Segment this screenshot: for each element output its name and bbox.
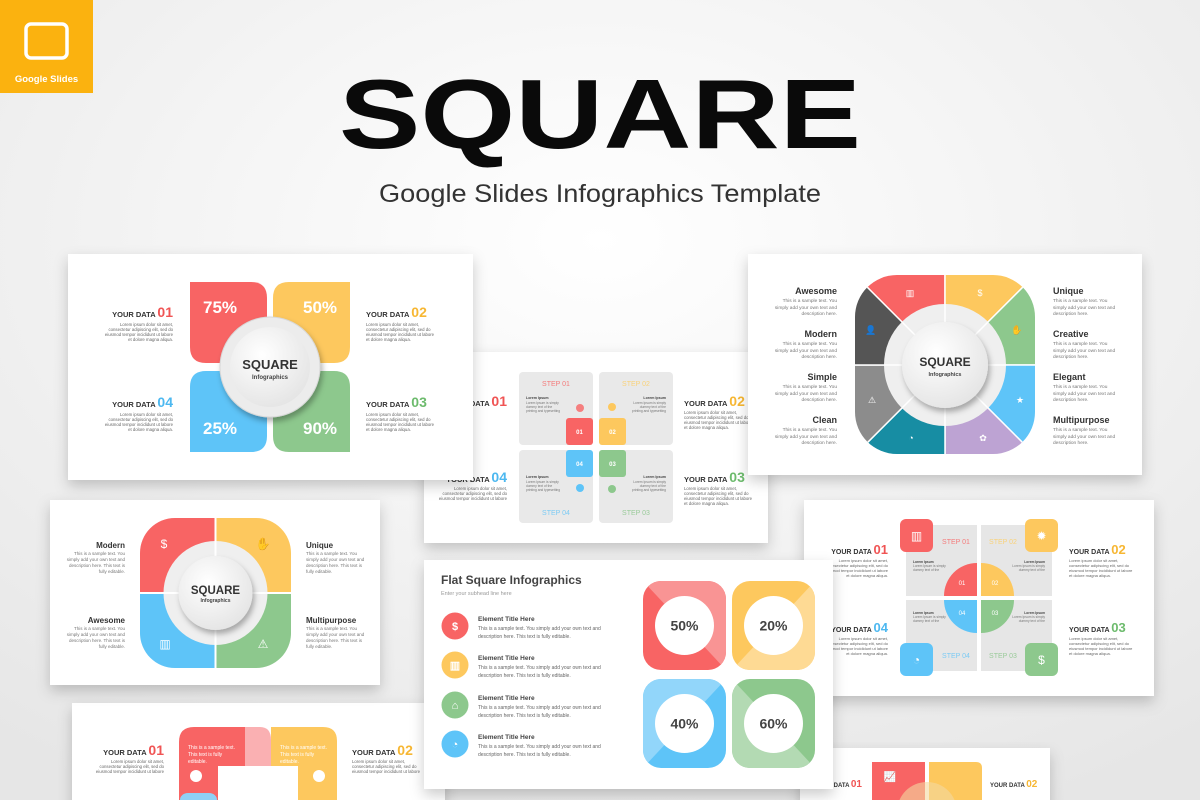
slide C: eight segment rounded square: description here. [802, 311, 837, 317]
slide C: eight segment rounded square: This is a sample text. You [1053, 427, 1108, 433]
slide G: bottom left partial: editable. [280, 759, 299, 765]
slide E: flat square infographics: description here. This text is fully editable. [478, 713, 571, 719]
slide F: step tabs with center circle: eiusmod tempor incididunt ut labore [1069, 646, 1133, 651]
slide E: flat square infographics: ◔ [452, 739, 458, 751]
slide E: flat square infographics: Element Title Here [478, 695, 535, 702]
slide A: four squares with percentages: 50% [303, 298, 337, 317]
slide A: four squares with percentages: 75% [203, 298, 237, 317]
title: SQUARE [339, 59, 861, 169]
slide F: step tabs with center circle: et dolore magna aliqua. [846, 573, 888, 578]
slide G: bottom left partial: eiusmod tempor incididunt ut labore [96, 769, 165, 774]
slide D: four quadrant rounded square: Unique [306, 541, 334, 550]
slide F: step tabs with center circle: consectetur adipiscing elit, sed do [1069, 641, 1130, 646]
slide F: step tabs with center circle: Lorem ipsum dolor sit amet, [1069, 558, 1118, 563]
slide C: eight segment rounded square: This is a sample text. You [783, 384, 837, 390]
slide D: four quadrant rounded square: simply add your own text and [306, 632, 365, 637]
slide E: flat square infographics: Element Title Here [478, 655, 535, 662]
slide C: eight segment rounded square: description here. [802, 397, 837, 403]
subtitle: Google Slides Infographics Template [379, 180, 821, 208]
slide B: step grid: printing and typesetting [632, 488, 666, 492]
slide C: eight segment rounded square: This is a sample text. You [783, 427, 837, 433]
slide D: four quadrant rounded square: simply add your own text and [306, 557, 365, 562]
slide G: bottom left partial: This text is fully [188, 752, 223, 758]
slide F: step tabs with center circle: Lorem ipsum dolor sit amet, [839, 636, 888, 641]
slide E: flat square infographics: Element Title Here [478, 616, 535, 623]
slide A: four squares with percentages: YOUR DATA 04 [112, 394, 173, 410]
slide D: four quadrant rounded square: fully editable. [99, 644, 125, 649]
slide B: step grid: Lorem Ipsum [526, 396, 549, 400]
slide G: bottom left partial [72, 703, 445, 800]
slide B: step grid: Lorem ipsum dolor sit amet, [684, 410, 737, 415]
slide A: four squares with percentages: eiusmod tempor incididunt ut labore [366, 422, 435, 427]
slide D: four quadrant rounded square: This is a sample text. You [74, 551, 125, 556]
slide G: bottom left partial: editable. [188, 759, 207, 765]
slide F: step tabs with center circle: et dolore magna aliqua. [1069, 573, 1111, 578]
slide B: step grid: YOUR DATA 03 [684, 469, 745, 485]
slide E: flat square infographics: description here. This text is fully editable. [478, 673, 571, 679]
slide D: four quadrant rounded square: description here. This text is [306, 563, 363, 568]
slide A: four squares with percentages: consectetur adipiscing elit, sed do [366, 327, 431, 332]
slide B: step grid: dummy text of the [526, 484, 552, 488]
slide B: step grid: Lorem Ipsum [643, 475, 666, 479]
slide C: eight segment rounded square [742, 254, 1148, 488]
slide H: bottom right partial: YOUR DATA 01 [815, 779, 862, 790]
slide E: flat square infographics: Element Title Here [478, 734, 535, 741]
slide A: four squares with percentages: Lorem ipsum dolor sit amet, [366, 322, 419, 327]
logo: Google Slides badge [0, 0, 93, 93]
slide G: bottom left partial: Lorem ipsum dolor sit amet, [111, 759, 164, 764]
slide A: four squares with percentages: Lorem ipsum dolor sit amet, [366, 412, 419, 417]
slide C: eight segment rounded square: simply add your own text and [775, 391, 837, 397]
slide C: eight segment rounded square: simply add your own text and [1053, 391, 1115, 397]
slide B: step grid: 04 [576, 462, 583, 468]
slide B: step grid: et dolore magna aliqua. [684, 501, 729, 506]
slide E: flat square infographics: 20% [759, 618, 788, 634]
slide B: step grid: consectetur adipiscing elit, sed do [684, 491, 749, 496]
slide F: step tabs with center circle: dummy text of the [913, 568, 939, 572]
slide F: step tabs with center circle: Lorem Ipsum is simply [913, 615, 946, 619]
slide G: bottom left partial: Lorem ipsum dolor sit amet, [352, 759, 405, 764]
slide D: four quadrant rounded square: simply add your own text and [67, 632, 125, 637]
slide F: step tabs with center circle: 02 [992, 581, 999, 587]
slide B: step grid: Lorem Ipsum is simply [526, 401, 559, 405]
slide B: step grid: eiusmod tempor incididunt ut labore [684, 420, 753, 425]
slide B: step grid: printing and typesetting [632, 409, 666, 413]
slide B: step grid: eiusmod tempor incididunt ut labore [439, 496, 508, 501]
slide H: bottom right partial [800, 748, 1050, 800]
slide F: step tabs with center circle: ◔ [913, 653, 920, 667]
slide C: eight segment rounded square: description here. [802, 354, 837, 360]
slide F: step tabs with center circle: STEP 02 [989, 539, 1017, 546]
slide G: bottom left partial: This text is fully [280, 752, 315, 758]
slide B: step grid: dummy text of the [526, 405, 552, 409]
slide C: eight segment rounded square: Awesome [795, 286, 837, 296]
slide B: step grid: STEP 02 [622, 381, 650, 388]
slide F: step tabs with center circle: consectetur adipiscing elit, sed do [828, 563, 889, 568]
slide C: eight segment rounded square: ⚠ [868, 395, 876, 405]
slide F: step tabs with center circle: eiusmod tempor incididunt ut labore [1069, 568, 1133, 573]
slide E: flat square infographics: 40% [670, 716, 699, 732]
slide A: four squares with percentages: Infographics [252, 375, 289, 381]
slide C: eight segment rounded square: simply add your own text and [1053, 434, 1115, 440]
slide B: step grid: Lorem ipsum dolor sit amet, [684, 486, 737, 491]
slide E: flat square infographics [424, 560, 833, 789]
slide B: step grid: Lorem Ipsum [526, 475, 549, 479]
slide F: step tabs with center circle: Lorem Ipsum [1024, 611, 1045, 615]
slide D: four quadrant rounded square: fully editable. [306, 569, 332, 574]
slide E: flat square infographics: description here. This text is fully editable. [478, 634, 571, 640]
slide B: step grid: YOUR DATA 02 [684, 393, 745, 409]
slide E: flat square infographics: description here. This text is fully editable. [478, 752, 571, 758]
slide G: bottom left partial: consectetur adipiscing elit, sed do [100, 764, 165, 769]
slide C: eight segment rounded square: Infographics [928, 372, 962, 378]
slide F: step tabs with center circle: eiusmod tempor incididunt ut labore [825, 646, 889, 651]
slide F: step tabs with center circle: YOUR DATA 01 [831, 542, 888, 557]
slide F: step tabs with center circle: ✹ [1036, 529, 1047, 543]
slide B: step grid: dummy text of the [640, 484, 666, 488]
slide F: step tabs with center circle: Lorem Ipsum [913, 611, 934, 615]
slide D: four quadrant rounded square: fully editable. [306, 644, 332, 649]
slide E: flat square infographics: 60% [759, 716, 788, 732]
slide D: four quadrant rounded square: description here. This text is [69, 638, 126, 643]
slide F: step tabs with center circle: Lorem ipsum dolor sit amet, [839, 558, 888, 563]
slide E: flat square infographics: ⌂ [452, 700, 458, 712]
slide B: step grid: Lorem Ipsum is simply [526, 480, 559, 484]
slide F: step tabs with center circle: YOUR DATA 03 [1069, 620, 1126, 635]
slide G: bottom left partial: This is a sample text. [280, 745, 327, 751]
slide B: step grid: 03 [609, 462, 616, 468]
slide A: four squares with percentages [68, 254, 473, 480]
slide F: step tabs with center circle: ▥ [911, 529, 922, 543]
slide E: flat square infographics: This is a sample text. You simply add your own text and [478, 665, 601, 671]
slide F: step tabs with center circle: consectetur adipiscing elit, sed do [1069, 563, 1130, 568]
slide C: eight segment rounded square: This is a sample text. You [783, 298, 837, 304]
slide H: bottom right partial: 📈 [884, 770, 896, 783]
slide B: step grid: STEP 01 [542, 381, 570, 388]
slide A: four squares with percentages: Lorem ipsum dolor sit amet, [120, 322, 173, 327]
slide C: eight segment rounded square: simply add your own text and [1053, 305, 1115, 311]
slide C: eight segment rounded square: description here. [802, 440, 837, 446]
slide G: bottom left partial: eiusmod tempor incididunt ut labore [352, 769, 421, 774]
slide D: four quadrant rounded square: Multipurpose [306, 616, 357, 625]
slide F: step tabs with center circle: dummy text of the [1019, 619, 1045, 623]
slide B: step grid: printing and typesetting [526, 488, 560, 492]
slide C: eight segment rounded square: 👤 [865, 324, 877, 335]
slide A: four squares with percentages: consectetur adipiscing elit, sed do [366, 417, 431, 422]
slide D: four quadrant rounded square [50, 500, 380, 685]
slide D: four quadrant rounded square: ✋ [256, 537, 270, 551]
slide D: four quadrant rounded square: fully editable. [99, 569, 125, 574]
slide A: four squares with percentages: 90% [303, 419, 337, 438]
slide D: four quadrant rounded square: Modern [96, 541, 125, 550]
slide C: eight segment rounded square: $ [977, 288, 983, 298]
slide A: four squares with percentages: YOUR DATA 03 [366, 394, 427, 410]
slide H: bottom right partial: YOUR DATA 02 [990, 779, 1038, 790]
slide D: four quadrant rounded square: ⚠ [258, 637, 269, 651]
slide C: eight segment rounded square: Elegant [1053, 372, 1086, 382]
slide G: bottom left partial: This is a sample text. [188, 745, 235, 751]
slide A: four squares with percentages: et dolore magna aliqua. [128, 337, 173, 342]
slide B: step grid: eiusmod tempor incididunt ut labore [684, 496, 753, 501]
slide C: eight segment rounded square: ◔ [908, 433, 914, 443]
slide F: step tabs with center circle: consectetur adipiscing elit, sed do [828, 641, 889, 646]
slide F: step tabs with center circle: YOUR DATA 04 [831, 620, 889, 635]
slide C: eight segment rounded square: ▥ [906, 288, 914, 298]
slide F: step tabs with center circle: STEP 04 [942, 653, 970, 660]
slide D: four quadrant rounded square: This is a sample text. You [74, 626, 125, 631]
slide F: step tabs with center circle: et dolore magna aliqua. [1069, 651, 1111, 656]
slide F: step tabs with center circle: dummy text of the [913, 619, 939, 623]
slide A: four squares with percentages: et dolore magna aliqua. [128, 427, 173, 432]
slide D: four quadrant rounded square: SQUARE [191, 585, 240, 597]
slide G: bottom left partial: YOUR DATA 02 [352, 742, 413, 758]
slide C: eight segment rounded square: Modern [804, 329, 837, 339]
slide A: four squares with percentages: 25% [203, 419, 237, 438]
slide C: eight segment rounded square: This is a sample text. You [1053, 298, 1108, 304]
slide C: eight segment rounded square: simply add your own text and [1053, 348, 1115, 354]
slide C: eight segment rounded square: Unique [1053, 286, 1084, 296]
slide F: step tabs with center circle: 04 [959, 611, 966, 617]
slide B: step grid: Lorem ipsum dolor sit amet, [454, 486, 507, 491]
slide F: step tabs with center circle: eiusmod tempor incididunt ut labore [825, 568, 889, 573]
slide A: four squares with percentages: eiusmod tempor incididunt ut labore [105, 332, 174, 337]
slide F: step tabs with center circle: Lorem Ipsum is simply [1012, 615, 1045, 619]
slide G: bottom left partial: consectetur adipiscing elit, sed do [352, 764, 417, 769]
slide F: step tabs with center circle: et dolore magna aliqua. [846, 651, 888, 656]
logo: Google Slides badge: Google Slides [15, 74, 78, 85]
slide A: four squares with percentages: eiusmod tempor incididunt ut labore [105, 422, 174, 427]
slide A: four squares with percentages: YOUR DATA 01 [112, 304, 173, 320]
slide B: step grid: et dolore magna aliqua. [684, 425, 729, 430]
slide C: eight segment rounded square: ✿ [979, 433, 987, 443]
slide C: eight segment rounded square: Simple [807, 372, 837, 382]
slide G: bottom left partial: YOUR DATA 01 [103, 742, 164, 758]
slide E: flat square infographics: This is a sample text. You simply add your own text and [478, 705, 601, 711]
slide F: step tabs with center circle: Lorem Ipsum [1024, 560, 1045, 564]
slide C: eight segment rounded square: description here. [1053, 354, 1088, 360]
slide D: four quadrant rounded square: description here. This text is [306, 638, 363, 643]
slide B: step grid: Lorem Ipsum is simply [633, 480, 666, 484]
slide C: eight segment rounded square: ★ [1016, 395, 1024, 405]
slide F: step tabs with center circle: STEP 01 [942, 539, 970, 546]
slide B: step grid [424, 352, 768, 543]
slide C: eight segment rounded square: ✋ [1011, 324, 1023, 335]
slide C: eight segment rounded square: simply add your own text and [775, 305, 837, 311]
slide B: step grid: consectetur adipiscing elit, sed do [684, 415, 749, 420]
slide B: step grid: dummy text of the [640, 405, 666, 409]
slide A: four squares with percentages: consectetur adipiscing elit, sed do [108, 417, 174, 422]
slide C: eight segment rounded square: description here. [1053, 311, 1088, 317]
slide F: step tabs with center circle: $ [1038, 653, 1045, 667]
slide E: flat square infographics: Enter your subhead line here [441, 591, 512, 597]
slide F: step tabs with center circle: YOUR DATA 02 [1069, 542, 1126, 557]
slide B: step grid: STEP 04 [542, 510, 570, 517]
slide C: eight segment rounded square: SQUARE [919, 355, 971, 369]
slide C: eight segment rounded square: Multipurpose [1053, 415, 1110, 425]
slide F: step tabs with center circle: STEP 03 [989, 653, 1017, 660]
slide C: eight segment rounded square: simply add your own text and [775, 348, 837, 354]
slide A: four squares with percentages: SQUARE [242, 357, 298, 372]
slide D: four quadrant rounded square: Awesome [88, 616, 126, 625]
slide F: step tabs with center circle: dummy text of the [1019, 568, 1045, 572]
slide B: step grid: YOUR DATA 04 [446, 469, 507, 485]
slide C: eight segment rounded square: This is a sample text. You [1053, 384, 1108, 390]
slide A: four squares with percentages: eiusmod tempor incididunt ut labore [366, 332, 435, 337]
slide B: step grid: YOUR DATA 01 [446, 393, 507, 409]
slide C: eight segment rounded square: description here. [1053, 440, 1088, 446]
slide C: eight segment rounded square: Creative [1053, 329, 1089, 339]
slide F: step tabs with center circle: Lorem Ipsum is simply [1012, 564, 1045, 568]
slide B: step grid: 01 [576, 430, 583, 436]
slide D: four quadrant rounded square: Infographics [200, 598, 231, 604]
slide C: eight segment rounded square: This is a sample text. You [783, 341, 837, 347]
slide B: step grid: 02 [609, 430, 616, 436]
slide D: four quadrant rounded square: This is a sample text. You [306, 551, 358, 556]
slide B: step grid: Lorem Ipsum [643, 396, 666, 400]
slide C: eight segment rounded square: Clean [812, 415, 837, 425]
slide E: flat square infographics: This is a sample text. You simply add your own text and [478, 626, 601, 632]
slide F: step tabs with center circle: Lorem ipsum dolor sit amet, [1069, 636, 1118, 641]
slide A: four squares with percentages: et dolore magna aliqua. [366, 337, 411, 342]
slide A: four squares with percentages: Lorem ipsum dolor sit amet, [120, 412, 173, 417]
slide A: four squares with percentages: et dolore magna aliqua. [366, 427, 411, 432]
slide E: flat square infographics: This is a sample text. You simply add your own text and [478, 744, 601, 750]
slide F: step tabs with center circle [804, 500, 1154, 696]
slide A: four squares with percentages: YOUR DATA 02 [366, 304, 427, 320]
slide E: flat square infographics: ▥ [450, 660, 460, 672]
slide C: eight segment rounded square: simply add your own text and [775, 434, 837, 440]
slide D: four quadrant rounded square: simply add your own text and [67, 557, 125, 562]
slide F: step tabs with center circle: Lorem Ipsum is simply [913, 564, 946, 568]
slide D: four quadrant rounded square: $ [161, 537, 168, 551]
slide E: flat square infographics: $ [452, 621, 458, 633]
slide E: flat square infographics: Flat Square Infographics [441, 573, 582, 587]
slide B: step grid: STEP 03 [622, 510, 650, 517]
slide A: four squares with percentages: consectetur adipiscing elit, sed do [108, 327, 174, 332]
slide D: four quadrant rounded square: ▥ [159, 637, 171, 651]
slide D: four quadrant rounded square: description here. This text is [69, 563, 126, 568]
slide F: step tabs with center circle: 01 [959, 581, 966, 587]
slide F: step tabs with center circle: Lorem Ipsum [913, 560, 934, 564]
slide B: step grid: consectetur adipiscing elit, sed do [442, 491, 508, 496]
slide C: eight segment rounded square: This is a sample text. You [1053, 341, 1108, 347]
slide B: step grid: printing and typesetting [526, 409, 560, 413]
slide B: step grid: Lorem Ipsum is simply [633, 401, 666, 405]
slide C: eight segment rounded square: description here. [1053, 397, 1088, 403]
slide E: flat square infographics: 50% [670, 618, 699, 634]
slide F: step tabs with center circle: 03 [992, 611, 999, 617]
slide D: four quadrant rounded square: This is a sample text. You [306, 626, 358, 631]
